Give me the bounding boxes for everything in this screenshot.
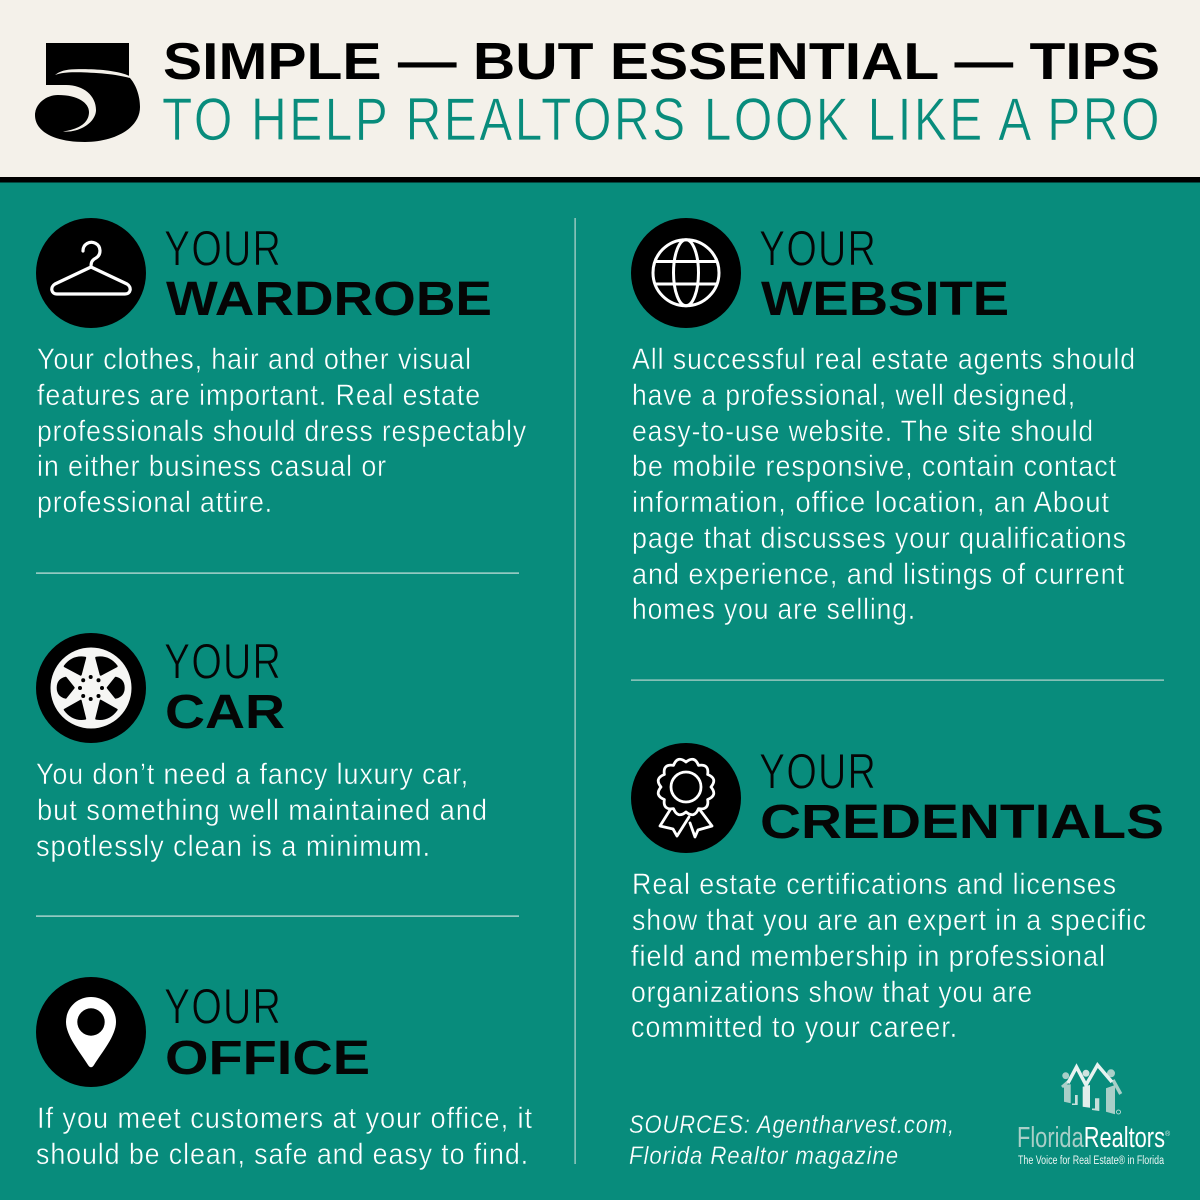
text: website body: and experience, and listings of current (632, 558, 1125, 591)
text: wardrobe body: features are important. Real estate (37, 379, 481, 412)
title (162, 33, 1162, 153)
icon: numeral 5 (28, 43, 140, 142)
text: office body: If you meet customers at your office, it (37, 1102, 533, 1135)
text: credentials body: Real estate certifications and licenses (632, 868, 1117, 901)
text: website body: All successful real estate agents should (632, 343, 1136, 376)
text: website body: information, office location, an About (632, 486, 1110, 519)
heading: your office: OFFICE (165, 1032, 370, 1085)
text: office body (36, 1102, 533, 1171)
icon: globe (631, 218, 741, 328)
text: credentials body: show that you are an expert in a specific (632, 904, 1147, 937)
heading: your credentials: YOUR (759, 744, 877, 800)
text: credentials body: field and membership in professional (631, 940, 1106, 973)
text: credentials body (631, 868, 1147, 1044)
text: wardrobe body: professional attire. (37, 486, 273, 519)
text: credentials body: organizations show that you are (631, 976, 1033, 1009)
icon: wheel (36, 633, 146, 743)
text: website body: page that discusses your qualifications (632, 522, 1127, 555)
icon: houses and people (1062, 1065, 1121, 1114)
heading: your wardrobe: WARDROBE (166, 273, 492, 326)
text: wardrobe body: in either business casual or (37, 450, 387, 483)
text: website body (632, 343, 1136, 626)
text: wardrobe body: professionals should dress respectably (37, 415, 527, 448)
text: sources (629, 1111, 955, 1170)
text: logo wordmark: FloridaRealtors (1017, 1122, 1165, 1154)
text: office body: should be clean, safe and easy to find. (36, 1138, 529, 1171)
heading: your car: CAR (165, 686, 285, 739)
panel: car (36, 633, 488, 863)
header band (0, 0, 1200, 182)
panel: website (631, 218, 1136, 626)
text: website body: have a professional, well designed, (632, 379, 1076, 412)
divider: column rule (574, 218, 576, 1164)
heading: your wardrobe: YOUR (164, 220, 282, 276)
icon: hanger (36, 218, 146, 328)
icon: map pin (36, 977, 146, 1087)
heading: your wardrobe (164, 220, 492, 326)
heading: your website: WEBSITE (761, 273, 1009, 326)
text: car body: but something well maintained and (37, 794, 488, 827)
heading: your office (164, 978, 370, 1085)
text: wardrobe body (37, 343, 527, 519)
text: sources: Florida Realtor magazine (629, 1142, 899, 1170)
panel: wardrobe (36, 218, 527, 519)
panel: office (36, 977, 533, 1171)
logo: Florida Realtors (1017, 1065, 1171, 1167)
text: car body: spotlessly clean is a minimum. (36, 830, 431, 863)
text: car body: You don’t need a fancy luxury car, (36, 758, 469, 791)
heading: your car: YOUR (164, 634, 282, 690)
heading: your credentials (759, 744, 1164, 849)
text: wardrobe body: Your clothes, hair and other visual (37, 343, 472, 376)
heading: your car (164, 634, 285, 739)
icon: award ribbon (631, 743, 741, 853)
text: logo wordmark: ® (1165, 1130, 1171, 1138)
text: website body: easy-to-use website. The site should (632, 415, 1094, 448)
heading: your website (759, 220, 1009, 326)
text: sources: SOURCES: Agentharvest.com, (629, 1111, 955, 1139)
title: SIMPLE — BUT ESSENTIAL — TIPS (163, 33, 1160, 91)
text: car body (36, 758, 488, 863)
text: website body: homes you are selling. (632, 593, 916, 626)
panel: credentials (631, 743, 1164, 1044)
text: website body: be mobile responsive, contain contact (632, 450, 1117, 483)
heading: your website: YOUR (759, 220, 877, 276)
heading: your credentials: CREDENTIALS (760, 796, 1164, 849)
text: credentials body: committed to your career. (631, 1011, 958, 1044)
heading: your office: YOUR (164, 978, 282, 1034)
